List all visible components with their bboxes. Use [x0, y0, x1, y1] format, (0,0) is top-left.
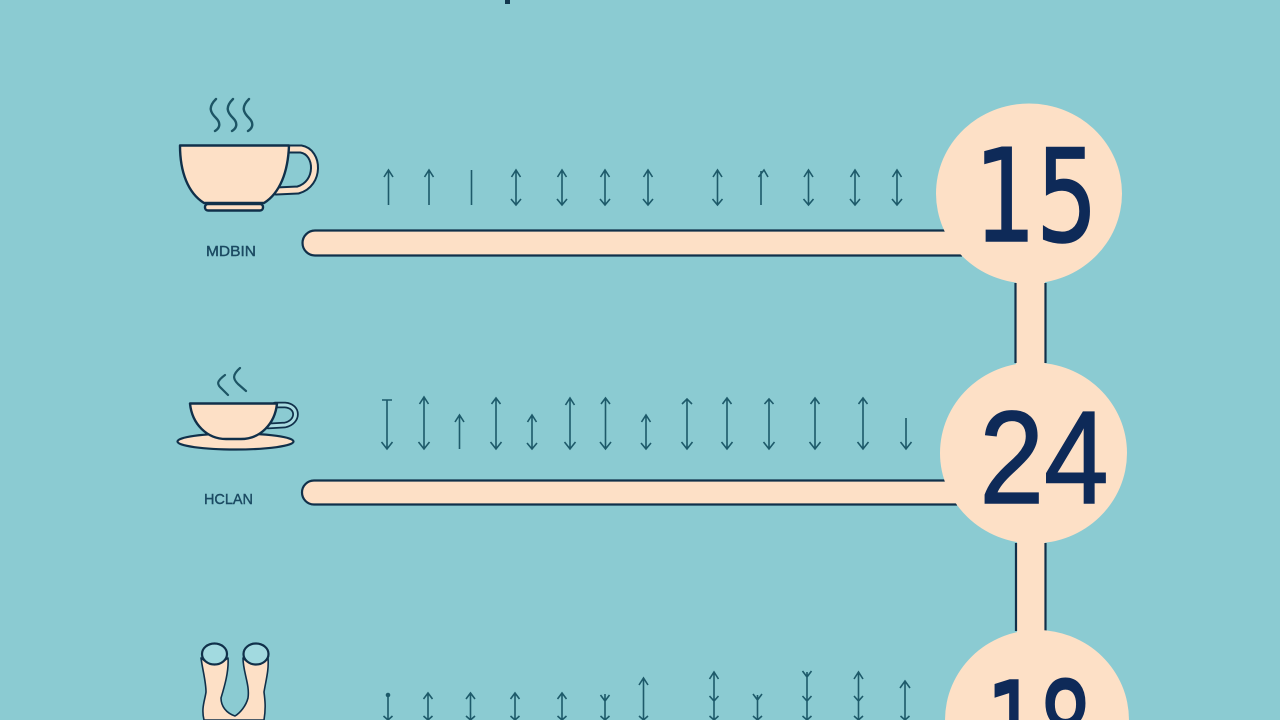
bar: row 1: [303, 230, 962, 256]
icon: steaming coffee cup: [180, 99, 315, 210]
icon: U-shaped tube: [201, 644, 268, 720]
bar: row 2: [302, 480, 957, 504]
connector: 15 to 24: [1016, 280, 1046, 368]
label: row 1: MDBIN: [206, 243, 256, 260]
circle: value 18: [945, 630, 1129, 720]
arrows: row 3: [384, 671, 910, 720]
label: row 2: HCLAN: [204, 491, 253, 508]
circle: value 15: 15: [974, 122, 1098, 271]
icon: cup with saucer: [178, 368, 296, 450]
arrows: row 1: [384, 170, 902, 205]
circle: value 15: [936, 104, 1122, 284]
circle: value 24: 24: [979, 384, 1109, 532]
arrows: row 2: [382, 397, 912, 449]
connector: 24 to 18: [1016, 540, 1046, 636]
circle: value 24: [940, 362, 1127, 544]
